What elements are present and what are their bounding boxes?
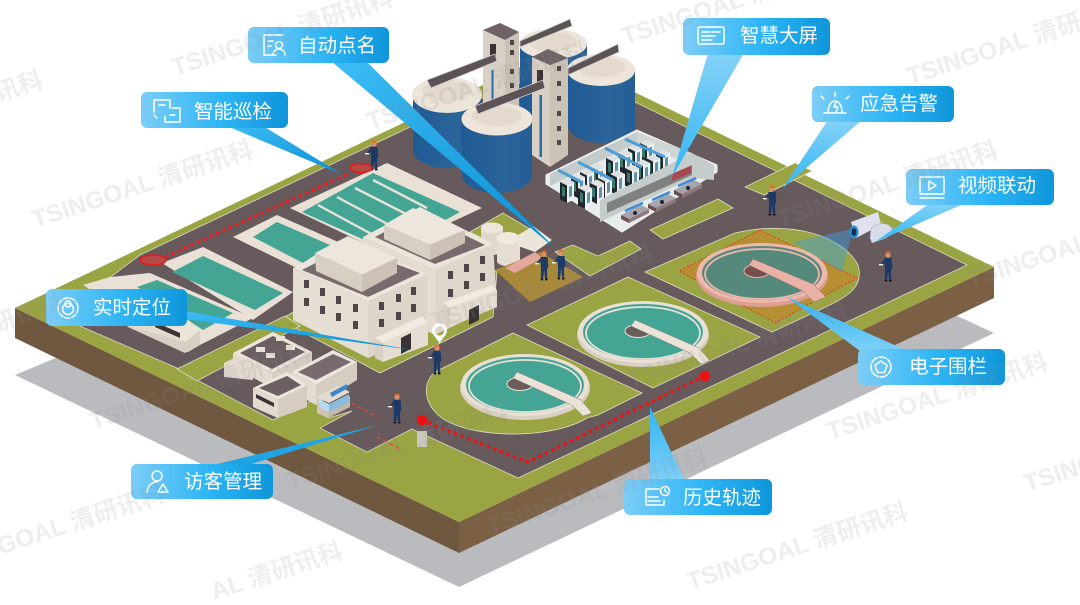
bridge 1 [427,19,572,88]
server racks [558,139,670,209]
icon: visitor [147,471,168,492]
callout: video linkage [875,169,1054,242]
annex [224,355,253,380]
gate barriers [352,403,400,449]
icon: patrol [154,100,180,122]
guard booth [316,384,350,418]
right wall [692,153,714,180]
silo back right [567,54,635,143]
icon: history [646,486,670,505]
icon: screen [698,27,724,44]
silos [412,19,635,193]
control desks [621,178,702,223]
callout: auto roll call: 自动点名 [298,35,376,57]
icon: roll call [264,35,285,55]
tower 1 [483,23,519,115]
watermarks: TSINGOAL 清研讯科 [363,38,592,136]
tank C [162,247,293,320]
building back [363,207,497,335]
electronic fence zone [679,230,857,323]
callout: real-time location [46,289,413,350]
orange zone [495,252,583,302]
pink pipe [505,252,542,273]
back small tanks and pipe [481,222,583,302]
tank D [83,273,253,353]
callout: visitor management [131,425,378,499]
watermarks: TSINGOAL 清研讯科 [28,136,257,234]
icon: fence [871,357,891,377]
callout: smart patrol: 智能巡检 [194,101,272,123]
silo front [462,102,532,193]
clarifier 1 [460,354,592,420]
watermarks: AL 清研讯科 [207,537,346,605]
ground slab [15,52,994,553]
camera with view cone [793,212,892,272]
block 2 [292,350,357,405]
callout: big screen [672,18,830,177]
tower 2 [532,49,568,167]
buildings [224,207,497,449]
back wall [550,132,637,186]
callout: big screen: 智慧大屏 [740,25,818,47]
callout: smart patrol [141,92,343,175]
clarifier 3 [696,243,828,307]
callout: electronic fence [787,297,1005,385]
silo back centre [519,29,587,128]
callout: electronic fence: 电子围栏 [909,356,987,378]
building front [293,236,428,362]
callout: video linkage: 视频联动 [958,175,1036,197]
workers [365,140,892,423]
tank B [233,215,345,272]
icon: location [58,298,78,318]
gate post [417,431,427,447]
clarifier 2 [577,301,710,367]
icon: alert [821,92,849,113]
callout: emergency alert: 应急告警 [860,93,938,115]
watermarks: TSINGOAL 清研讯科 [823,348,1052,446]
watermarks: TSINGOAL 清研讯科 [773,136,1002,234]
patrol route [140,164,372,265]
location pin [432,323,447,343]
lawn under buildings [280,235,497,373]
callout: history track: 历史轨迹 [683,487,761,509]
grass patches [177,163,859,434]
clarifier lawn 1 [426,333,642,434]
block 3 [253,372,307,418]
lawn strips [650,199,733,239]
clarifiers [460,230,857,420]
watermarks: TSINGOAL 清研讯科 [283,398,512,496]
road network [80,70,967,478]
icon: video [920,177,944,198]
admin block [224,332,357,418]
left tanks [83,163,482,353]
callout: visitor management: 访客管理 [184,471,262,493]
watermarks: TSINGOAL 清研讯科 [428,238,657,336]
watermarks: TSINGOAL 清研讯科 [683,498,912,596]
bridge 2 [475,44,619,114]
watermarks: TSINGOAL 清研讯科 [86,338,315,436]
silo back left [412,77,482,168]
watermarks: TSINGOAL 清研讯科 [623,296,852,394]
watermarks: TSINGOAL 清研讯科 [483,443,712,541]
clarifier lawn 3 [645,228,859,332]
block 1 [233,332,312,388]
control room [546,130,717,232]
ground shadow [15,315,994,587]
callout: auto roll call [248,27,557,250]
clarifier lawn 2 [527,277,760,388]
tank A [290,163,482,253]
callout: real-time location: 实时定位 [93,297,171,319]
callout: history track [624,407,772,515]
history track [417,371,710,462]
grass surface [15,52,994,522]
callout: emergency alert [783,86,954,188]
divider wall with screens [600,153,692,222]
